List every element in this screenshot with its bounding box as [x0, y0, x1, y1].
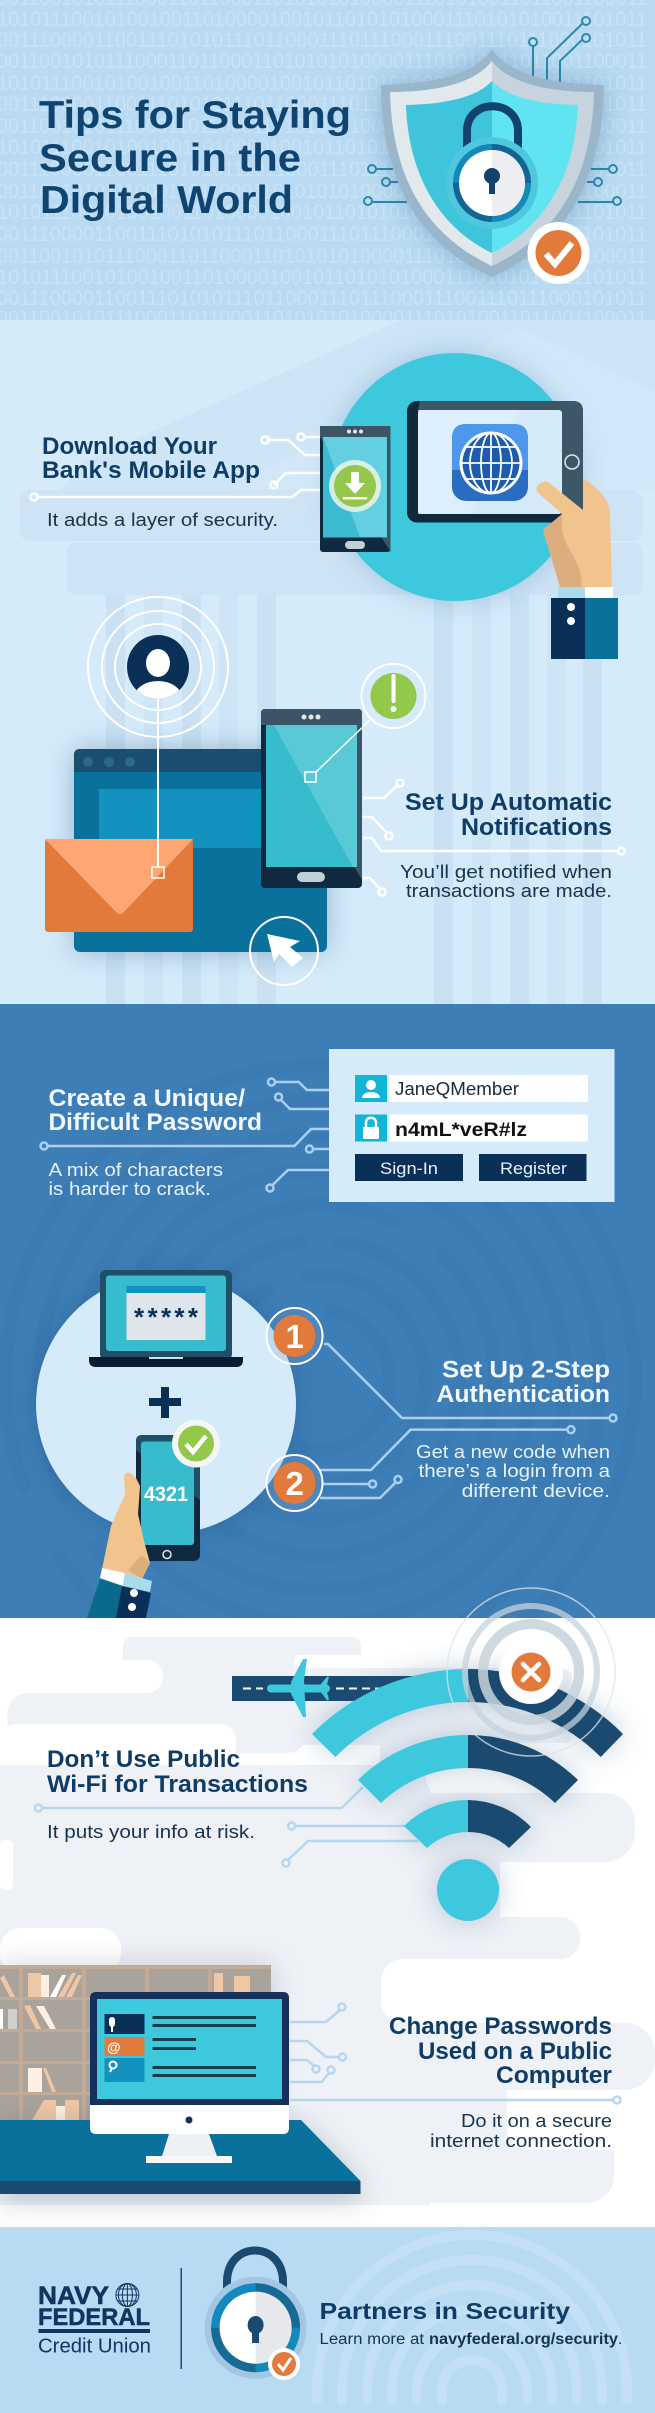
white cloud cutouts: [0, 1655, 655, 2150]
section: create a unique password: [40, 1049, 614, 1202]
heading: Difficult Password: [48, 1109, 262, 1136]
divider: [180, 2268, 182, 2369]
badge: step 2: 2: [286, 1465, 304, 1502]
panel: blue password and authentication section: [0, 1004, 655, 1618]
body text: different device.: [462, 1480, 610, 1501]
fingerprint pattern: [317, 2235, 627, 2400]
icon: laptop with password dialog: *****: [134, 1302, 199, 1332]
badge: step 1: [266, 1308, 322, 1364]
password field: [355, 1114, 588, 1142]
logo: navy federal credit union: [38, 2282, 151, 2358]
cuff: [100, 1568, 125, 1586]
hand: [102, 1472, 150, 1579]
body text: internet connection.: [430, 2130, 612, 2151]
icon: desktop monitor: [90, 1992, 289, 2163]
heading: Create a Unique/: [48, 1085, 245, 1112]
body text with link: [320, 2331, 622, 2348]
body text: It adds a layer of security.: [47, 509, 278, 530]
icon: laptop with password dialog: [89, 1270, 243, 1367]
body text with link: navyfederal.org/security: [429, 2331, 618, 2348]
runway with plane: [232, 1659, 422, 1717]
connector lines: [35, 1787, 418, 1866]
connector lines: [40, 1078, 329, 1192]
icon: globe app: [452, 424, 528, 501]
heading: Wi-Fi for Transactions: [47, 1771, 308, 1798]
heading: Don’t Use Public: [47, 1746, 240, 1773]
screen tiles: @: [107, 2039, 121, 2055]
icon: tablet with globe app: [407, 401, 583, 522]
connector lines: [363, 780, 625, 896]
icon: phone with download: [320, 426, 390, 552]
icon: cursor: [250, 917, 318, 985]
heading: Change Passwords: [389, 2013, 612, 2040]
body text: [430, 2110, 612, 2151]
heading: Authentication: [436, 1381, 610, 1408]
body text: You’ll get notified when: [400, 861, 612, 882]
title: Digital World: [40, 179, 293, 222]
icon: padlock: [205, 2250, 307, 2380]
body text: Do it on a secure: [461, 2110, 612, 2131]
icon: padlock: [446, 106, 538, 229]
badge: step 2: [266, 1455, 322, 1511]
title: Tips for Staying: [39, 94, 351, 137]
password field: n4mL*veR#lz: [395, 1120, 527, 1141]
light circle: [36, 1274, 296, 1534]
title: Secure in the: [39, 137, 301, 180]
body text: A mix of characters: [48, 1159, 223, 1180]
panel: white cloud section: [0, 1618, 655, 2227]
heading: [436, 1356, 610, 1408]
bookshelf: [0, 1965, 271, 2125]
panel: footer: [0, 2227, 655, 2413]
heading: [48, 1085, 262, 1136]
section: set up automatic notifications: [45, 597, 625, 985]
icon: concentric rings with person: [88, 597, 228, 878]
sleeve: [87, 1579, 122, 1618]
panel: header: [0, 0, 655, 330]
connector lines: [290, 2004, 620, 2104]
screen text lines: [152, 2016, 256, 2077]
icon: phone with code and hand: [87, 1420, 220, 1618]
heading: [47, 1746, 308, 1798]
body text: transactions are made.: [406, 880, 612, 901]
body text with link: Learn more at: [320, 2331, 425, 2348]
username field: [355, 1075, 588, 1102]
cloud background: [0, 1637, 655, 2205]
icon: envelope: [45, 839, 193, 932]
body text with link: .: [618, 2331, 622, 2348]
heading: Download Your: [42, 433, 217, 460]
heading: [42, 433, 260, 484]
icon: wi-fi symbol: [312, 1669, 623, 1921]
teal circle: [331, 353, 579, 601]
body text: It puts your info at risk.: [47, 1821, 255, 1842]
heading: Set Up 2-Step: [442, 1356, 610, 1384]
icon: rings with x alert: [447, 1588, 615, 1756]
login panel: [329, 1049, 614, 1202]
section: download your bank's mobile app: [30, 353, 618, 659]
fingerprint pattern: [5, 1065, 635, 1695]
logo: navy federal credit union: Credit Union: [38, 2336, 151, 2358]
sign-in button: [355, 1154, 463, 1181]
section: public wi-fi: [35, 1588, 623, 1921]
heading: Computer: [496, 2062, 612, 2089]
books: [0, 1973, 250, 2120]
body text: [400, 861, 612, 901]
badge: step 1: 1: [286, 1318, 304, 1355]
screen tiles: [104, 2014, 144, 2082]
icon: hand with suit cuff: [536, 478, 618, 659]
connector lines: [30, 434, 320, 500]
register button: Register: [500, 1159, 567, 1178]
heading: [405, 789, 612, 841]
icon: orange check badge: [528, 222, 590, 284]
logo: navy federal credit union: FEDERAL: [38, 2304, 150, 2331]
heading: Set Up Automatic: [405, 789, 612, 816]
body text: [48, 1159, 223, 1199]
heading: Used on a Public: [418, 2038, 612, 2065]
icon: circuit lines: [364, 17, 621, 205]
username field: JaneQMember: [395, 1079, 519, 1099]
register button: [479, 1154, 586, 1181]
body text: [416, 1441, 611, 1501]
body text: is harder to crack.: [48, 1178, 211, 1199]
sign-in button: Sign-In: [380, 1159, 438, 1178]
icon: browser window: [74, 749, 327, 952]
icon: phone with code and hand: 4321: [144, 1483, 188, 1506]
logo: navy federal credit union: NAVY: [38, 2282, 109, 2310]
heading: Notifications: [461, 814, 612, 841]
heading: [389, 2013, 612, 2089]
panel: download and notifications background: [0, 320, 655, 1004]
section: set up 2-step authentication: [36, 1270, 616, 1618]
connector lines: [320, 1344, 616, 1498]
table: [0, 2120, 360, 2200]
bank building silhouette: [20, 320, 655, 1004]
heading: Bank's Mobile App: [42, 457, 260, 484]
body text: there’s a login from a: [418, 1460, 611, 1481]
heading: Partners in Security: [320, 2298, 570, 2324]
icon: plus: [149, 1387, 181, 1418]
icon: phone with alert: [261, 664, 426, 888]
title: [39, 94, 351, 222]
icon: security shield: [381, 49, 604, 277]
section: change passwords on a public computer: [0, 1965, 620, 2200]
body text: Get a new code when: [416, 1441, 610, 1462]
